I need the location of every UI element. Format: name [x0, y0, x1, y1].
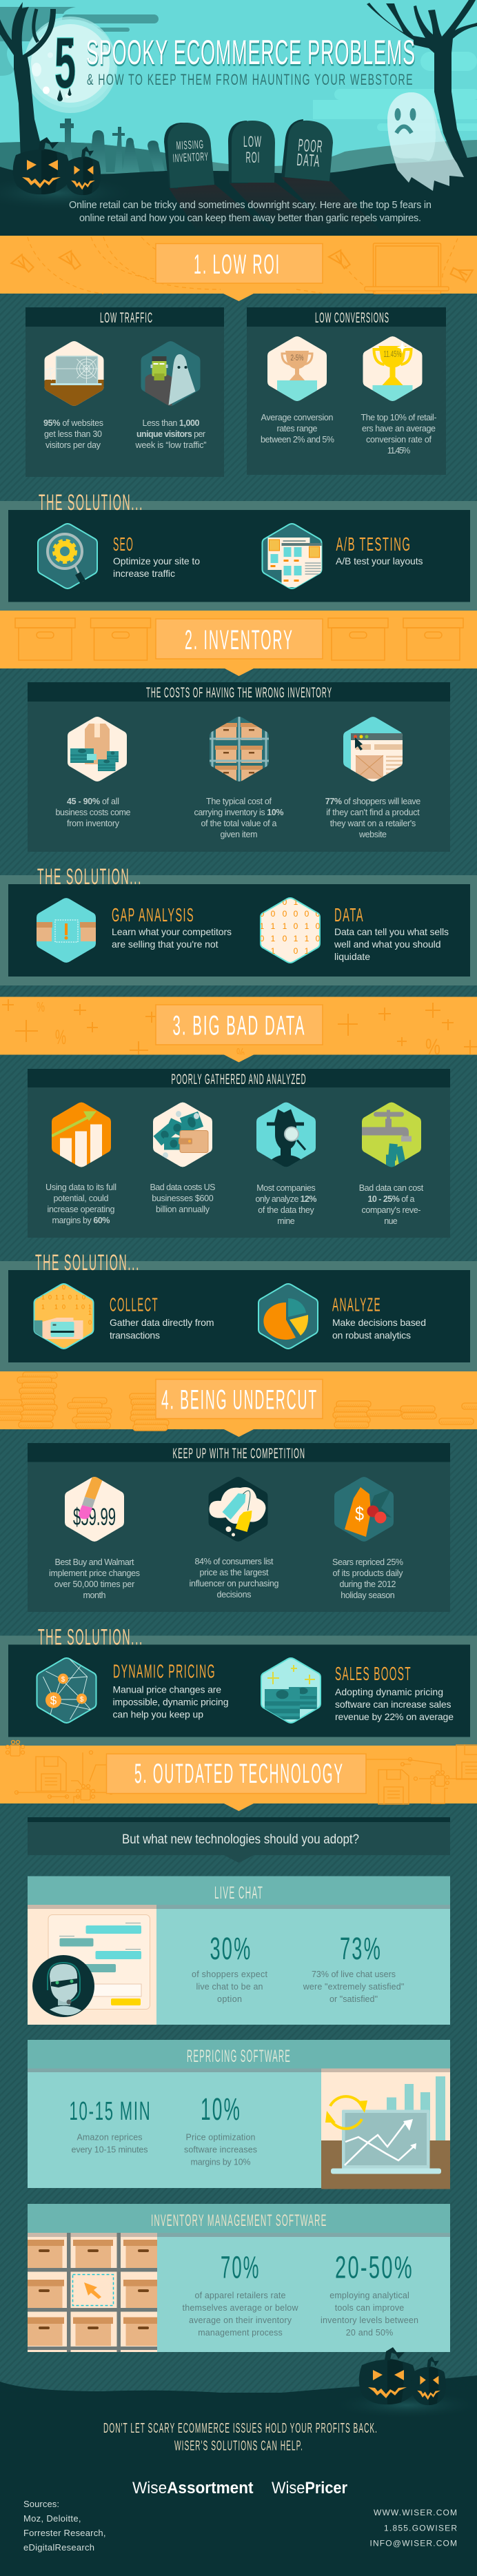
ghost: [387, 92, 464, 191]
panel: repricing software: [28, 2040, 450, 2189]
text: total value: of the total value of a: [201, 819, 277, 828]
text: transactions: transactions: [110, 1330, 160, 1341]
tombstone: poor data: [281, 119, 333, 181]
band decoration: [11, 237, 476, 294]
question text: But what new technologies should you adopt?: [122, 1832, 359, 1847]
text: data can tell: Data can tell you what sells: [334, 926, 449, 937]
band: 1. low roi: [0, 236, 477, 301]
text: 45-90%: 45 - 90% of all: [67, 797, 119, 806]
panel: keep up with the competition: [28, 1443, 450, 1612]
text: adopting: Adopting dynamic pricing: [335, 1686, 443, 1697]
stat: 20-50%: 20-50%: [335, 2249, 414, 2285]
intro text: online retail and how you can keep them away better than garlic repels vampires.: [79, 213, 421, 224]
pointer: [223, 294, 254, 301]
sources: eDigitalResearch: [23, 2542, 94, 2553]
illustration: laptop chart: [325, 2076, 445, 2174]
band: 4. being undercut: [0, 1371, 477, 1437]
icon: detective: [256, 1103, 316, 1170]
closing line 2: WISER'S SOLUTIONS CAN HELP.: [174, 2438, 303, 2453]
text: top 10 percent: The top 10% of retail-: [361, 413, 437, 422]
band title box: [156, 1380, 323, 1418]
band heading: 3. BIG BAD DATA: [172, 1010, 306, 1041]
icon: price network: $: [50, 1694, 57, 1707]
text: software can: software can increase sales: [335, 1699, 451, 1710]
band decoration: coins: [0, 1372, 477, 1431]
text: holiday: holiday season: [341, 1591, 395, 1600]
illustration: warehouse shelves: [28, 2233, 157, 2352]
text: visitors per day: visitors per day: [45, 440, 101, 450]
panel: live chat: LIVE CHAT: [214, 1883, 263, 1903]
band decoration: plus and percent: %: [425, 1034, 440, 1059]
text: business costs: business costs come: [55, 808, 131, 817]
panel: inventory management software: [28, 2204, 450, 2352]
contact details: 1.855.GOWISER: [384, 2524, 457, 2533]
panel: live chat: [28, 1876, 450, 2025]
text: increase operating: increase operating: [47, 1205, 115, 1214]
text: rates range: rates range: [277, 424, 318, 433]
text: software inc: software increases: [184, 2145, 257, 2154]
left tree loop branch: [34, 9, 38, 42]
text: bad data costs: Bad data costs US: [150, 1183, 215, 1192]
icon: small trophy: [267, 336, 327, 404]
text: ers have: ers have an average: [362, 424, 436, 433]
icon: thought cloud tags: [208, 1477, 267, 1542]
icon: card in hand: 0: [62, 1284, 65, 1291]
stat: 73%: 73%: [340, 1931, 382, 1966]
icon: leaky faucet: [362, 1103, 421, 1169]
text: 20 and 50: 20 and 50%: [346, 2328, 393, 2338]
panel: question: [28, 1817, 450, 1863]
text: amazon: Amazon reprices: [77, 2132, 142, 2142]
icon: card in hand: 1: [88, 1309, 92, 1316]
icon: small trophy: 2-5%: [291, 353, 304, 362]
icon: price network: $: [61, 1676, 65, 1684]
text: margins 10%: margins by 10%: [190, 2157, 251, 2167]
stat: 30%: 30%: [210, 1931, 252, 1966]
text: nue: nue: [384, 1216, 398, 1226]
logo: wisepricer: WisePricer: [272, 2479, 347, 2497]
text: implement: implement price changes: [49, 1568, 140, 1578]
icon: browser: [343, 717, 403, 785]
icon: data binary: 111010: [260, 921, 321, 931]
panel: solution 3: [0, 1250, 477, 1371]
text: liquidate: liquidate: [334, 951, 370, 962]
text: apparel: of apparel retailers rate: [194, 2291, 286, 2300]
text: potential: potential, could: [54, 1194, 109, 1203]
tombstone: low roi: [228, 121, 275, 183]
text: month: month: [83, 1591, 106, 1600]
pointer: [224, 1803, 254, 1811]
pointer: [224, 1429, 254, 1437]
text: gather data: Gather data directly from: [110, 1317, 214, 1328]
panel: repricing software: REPRICING SOFTWARE: [187, 2047, 291, 2066]
text: manual price: Manual price changes are: [113, 1684, 221, 1695]
text: of its products: of its products daily: [332, 1568, 403, 1578]
panel: solution 3: ANALYZE: [332, 1294, 381, 1315]
tombstone: low roi: ROI: [245, 149, 261, 166]
left tree: [0, 2, 56, 159]
intro text: Online retail can be tricky and sometimes downright scary. Here are the top 5 fears in: [69, 200, 432, 211]
band decoration: plus and percent: %: [236, 1046, 245, 1061]
illustration: chat window: [48, 1914, 150, 2010]
footer glow: [331, 2391, 477, 2419]
text: management: management process: [198, 2328, 283, 2338]
panel: low conversions: LOW CONVERSIONS: [315, 310, 389, 326]
icon: monster and ghost: [141, 341, 200, 407]
logo: wiseassortment: WiseAssortment: [132, 2479, 254, 2497]
band decoration: plus and percent: %: [55, 1026, 66, 1049]
text: 84%: 84% of consumers list: [194, 1557, 274, 1566]
icon: laptop with cobwebs: [44, 340, 103, 407]
icon: holiday price tag: $: [355, 1503, 364, 1524]
ground: [0, 156, 477, 236]
contact details: [369, 2508, 457, 2548]
pointer: [224, 1054, 254, 1063]
panel: solution 2: [0, 864, 477, 985]
icon: card in hand: 0: [88, 1319, 92, 1326]
text: influencer: influencer on purchasing: [189, 1579, 279, 1588]
text: optimize: Optimize your site to: [113, 555, 200, 566]
text: price opt: Price optimization: [186, 2132, 256, 2142]
text: 77%: 77% of shoppers will leave: [325, 797, 420, 806]
text: they want: they want on a retailer's: [330, 819, 416, 828]
icon: gap analysis: [37, 898, 96, 963]
text: get less: get less than 30: [44, 429, 102, 439]
icon: price eraser: [65, 1475, 124, 1542]
panel: costs of wrong inventory: [28, 682, 450, 852]
illustration: mummy agent: [32, 1955, 94, 2017]
band title box: [156, 619, 323, 659]
text: tools: tools can improve: [335, 2303, 404, 2313]
text: from inventory: from inventory: [67, 819, 120, 828]
icon: box and cash: [68, 717, 127, 781]
panel: solution 2: THE SOLUTION...: [37, 864, 142, 889]
panel: keep up with the competition: KEEP UP WITH THE COMPETITION: [172, 1446, 305, 1462]
band title box: [156, 244, 323, 283]
tombstone: missing inventory: MISSING: [176, 138, 204, 152]
text: satisfied: or "satisfied": [329, 1994, 378, 2004]
header scene: [0, 0, 477, 236]
text: average conversion: Average conversion: [261, 413, 334, 422]
panel: poorly gathered: POORLY GATHERED AND ANALYZED: [171, 1072, 306, 1087]
icon: cash stacks: [261, 1658, 321, 1723]
tombstone: poor data: DATA: [296, 150, 321, 171]
icon: card in hand: 01011010: [35, 1294, 85, 1301]
band decoration: boxes: [15, 618, 463, 660]
text: conversion rate: conversion rate of: [366, 435, 432, 444]
text: typical cost: The typical cost of: [206, 797, 272, 806]
panel: low conversions: [247, 307, 446, 475]
band: 3. big bad data: [0, 996, 477, 1063]
band title box: [106, 1754, 366, 1793]
text: given item: given item: [221, 830, 258, 839]
text: on robust: on robust analytics: [332, 1330, 411, 1341]
text: live chat: live chat to be an: [196, 1982, 263, 1992]
text: option: option: [217, 1994, 242, 2004]
band decoration: plus and percent: [2, 999, 477, 1061]
panel: poorly gathered: [28, 1069, 450, 1238]
text: a/b test: A/B test your layouts: [336, 555, 423, 566]
band: 1. low roi: 1. LOW ROI: [194, 249, 281, 280]
heading: dynamic pricing: DYNAMIC PRICING: [113, 1661, 216, 1681]
icon: seo: [38, 524, 97, 589]
icon: price network: $: [80, 1696, 84, 1704]
text: increase traffic: increase traffic: [113, 568, 175, 579]
text: decisions: decisions: [216, 1590, 251, 1599]
intro text: [69, 200, 432, 224]
panel: solution 1: [0, 490, 477, 611]
text: billion: billion annually: [156, 1205, 210, 1214]
text: company's: company's reve-: [361, 1205, 420, 1215]
clouds: [0, 7, 477, 131]
text: 73% users: 73% of live chat users: [312, 1970, 396, 1979]
pointer: [225, 668, 254, 676]
band title box: [156, 1005, 323, 1045]
band: 2. inventory: 2. INVENTORY: [185, 625, 294, 655]
text: week is low traffic: week is “low traffic”: [135, 440, 207, 450]
tombstone: poor data: POOR: [298, 136, 323, 156]
text: during: during the 2012: [339, 1580, 396, 1589]
panel: solution 1: THE SOLUTION...: [39, 490, 143, 515]
text: unique visitors: unique visitors per: [136, 429, 205, 439]
icon: holiday price tag: [334, 1477, 394, 1542]
icon: small pumpkin: [412, 2357, 446, 2405]
text: every: every 10-15 minutes: [72, 2145, 148, 2154]
text: 10-25%: 10 - 25% of a: [368, 1194, 415, 1204]
icon: card in hand: [34, 1284, 94, 1349]
text: between: between 2% and 5%: [261, 435, 334, 444]
icon: shelves: [210, 715, 269, 783]
icon: card in hand: 110101: [41, 1304, 92, 1311]
text: of the data: of the data they: [258, 1205, 314, 1215]
text: mine: mine: [277, 1216, 295, 1226]
text: employing: employing analytical: [329, 2291, 409, 2300]
icon: big pumpkin: [13, 137, 70, 194]
heading: data: DATA: [334, 904, 364, 926]
icon: pie chart: [258, 1284, 318, 1349]
distant graves: [60, 119, 165, 174]
text: learn: Learn what your competitors: [112, 926, 232, 937]
contact details: INFO@WISER.COM: [369, 2539, 457, 2548]
sources: Sources:: [23, 2499, 59, 2509]
icon: gold trophy: 11.45%: [383, 349, 402, 359]
text: margins: margins by 60%: [52, 1216, 110, 1225]
text: over 50,000: over 50,000 times per: [54, 1580, 134, 1589]
text: bad data can cost: Bad data can cost: [359, 1183, 424, 1193]
text: of shoppers: of shoppers expect: [192, 1970, 268, 1979]
icon: data binary: [260, 897, 321, 963]
text: well and what: well and what you should: [334, 939, 441, 950]
stat: 70%: 70%: [221, 2249, 261, 2285]
footer: [0, 2347, 477, 2576]
text: can help: can help you keep up: [113, 1709, 203, 1720]
text: most companies: Most companies: [256, 1183, 316, 1193]
tombstone: low roi: LOW: [243, 133, 262, 150]
icon: a/b testing: [262, 524, 321, 589]
panel: low traffic: LOW TRAFFIC: [100, 310, 153, 326]
tombstone: missing inventory: [164, 123, 214, 189]
moon: [23, 17, 117, 113]
text: less than 1,000: Less than 1,000: [142, 418, 200, 428]
text: find product: if they can't find a product: [326, 808, 420, 817]
stat: 10%: 10%: [201, 2092, 241, 2127]
right tree: [367, 0, 477, 162]
panel: solution 3: COLLECT: [110, 1294, 159, 1315]
ground glow: [0, 175, 138, 211]
icon: data binary: 010110: [260, 934, 321, 943]
text: businesses: businesses $600: [152, 1194, 214, 1203]
icon: big pumpkin: [359, 2347, 416, 2404]
stat: 10-15 min: 10-15 MIN: [69, 2097, 152, 2126]
icon: gold trophy: [363, 336, 422, 405]
big numeral five: [54, 23, 76, 103]
text: are selling: are selling that you're not: [112, 939, 219, 950]
panel: solution 4: THE SOLUTION...: [38, 1625, 143, 1650]
text: best buy: Best Buy and Walmart: [55, 1557, 134, 1567]
icon: wallet and cash: [153, 1103, 212, 1167]
heading: a/b testing: A/B TESTING: [336, 533, 411, 555]
text: 11.45%: 11.45%: [387, 446, 410, 456]
text: using data: Using data to its full: [45, 1183, 116, 1192]
icon: data binary: 101: [271, 946, 309, 956]
tombstone shadows: [169, 177, 386, 236]
icon: rising chart: [52, 1103, 111, 1169]
text: average on: average on their inventory: [189, 2316, 292, 2325]
text: price: price as the largest: [200, 1568, 269, 1577]
text: make decisions: Make decisions based: [332, 1317, 426, 1328]
sources: Forrester Research,: [23, 2528, 106, 2538]
panel: low traffic: [26, 307, 224, 477]
panel: solution 1: SEO: [113, 533, 134, 555]
text: website: website: [358, 830, 387, 839]
band decoration: circuits and floppies: [6, 1741, 477, 1804]
text: extremely: were "extremely satisfied": [303, 1982, 404, 1992]
icon: price network: [37, 1658, 97, 1723]
panel: solution 3: THE SOLUTION...: [35, 1250, 140, 1275]
icon: data binary: 01: [283, 897, 298, 907]
icon: data binary: 000000: [260, 909, 321, 919]
icon: small pumpkin: [65, 146, 101, 195]
sources: Moz, Deloitte,: [23, 2513, 81, 2524]
contact details: WWW.WISER.COM: [374, 2508, 457, 2517]
text: inventory levels: inventory levels between: [321, 2316, 418, 2325]
band: 2. inventory: [0, 611, 477, 676]
band decoration: plus and percent: %: [37, 1000, 45, 1015]
big numeral five: 5: [54, 23, 76, 103]
text: carrying: carrying inventory is 10%: [194, 808, 284, 817]
distant hills: [0, 140, 477, 236]
icon: price eraser: $59.99: [73, 1504, 116, 1531]
text: impossible: impossible, dynamic pricing: [113, 1697, 229, 1708]
text: revenue: revenue by 22% on average: [335, 1711, 454, 1722]
text: only analyze: only analyze 12%: [255, 1194, 317, 1204]
text: 95% of websites: 95% of websites: [43, 418, 103, 428]
sources: [23, 2499, 106, 2553]
text: sears: Sears repriced 25%: [332, 1557, 403, 1567]
panel: solution 4: [0, 1625, 477, 1746]
text: themselves: themselves average or below: [182, 2303, 298, 2313]
heading: gap analysis: GAP ANALYSIS: [112, 904, 194, 926]
band: 5. outdated technology: [0, 1741, 477, 1811]
tombstone: missing inventory: INVENTORY: [172, 150, 209, 165]
